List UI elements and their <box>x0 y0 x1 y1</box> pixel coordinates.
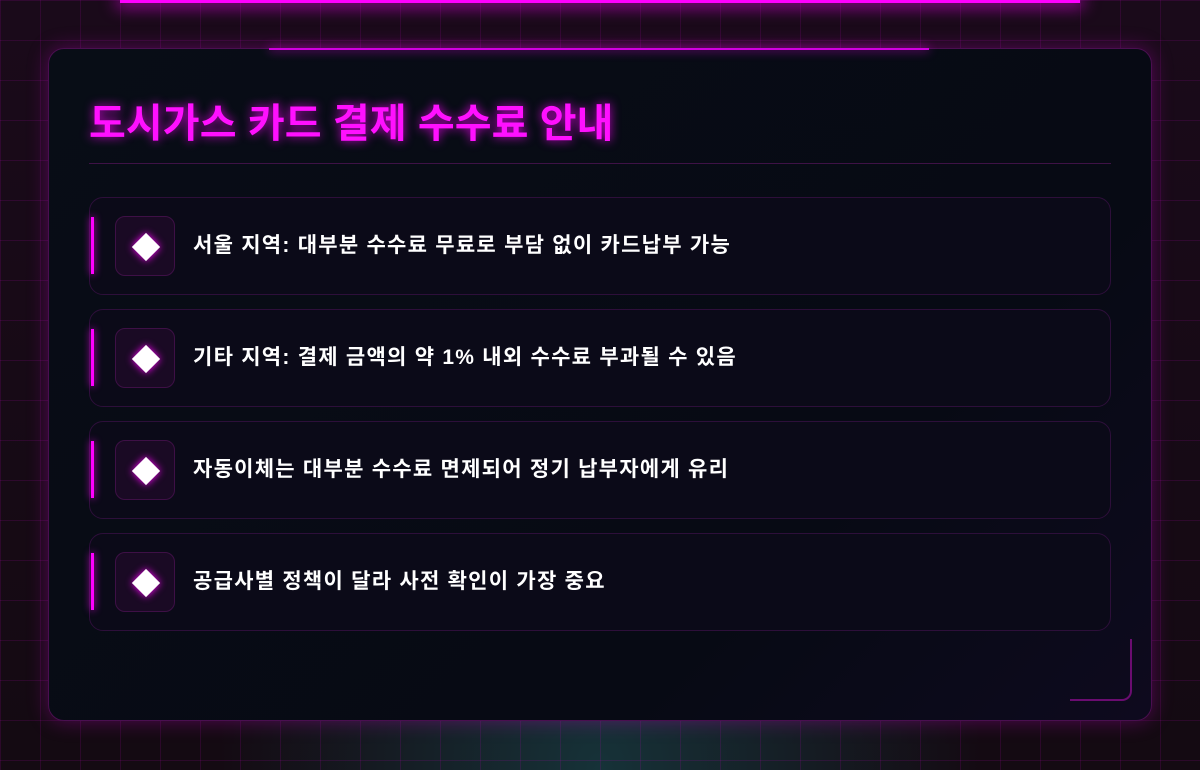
item: supplier policy <box>89 533 1111 631</box>
item: other regions <box>89 309 1111 407</box>
icon: diamond <box>115 216 175 276</box>
text: 자동이체는 대부분 수수료 면제되어 정기 납부자에게 유리 <box>193 458 729 481</box>
icon: diamond <box>115 328 175 388</box>
icon: diamond <box>115 552 175 612</box>
item: Seoul <box>89 197 1111 295</box>
icon: diamond <box>115 440 175 500</box>
item: auto transfer <box>89 421 1111 519</box>
text: 기타 지역: 결제 금액의 약 1% 내외 수수료 부과될 수 있음 <box>193 346 737 369</box>
title: 도시가스 카드 결제 수수료 안내 <box>89 102 614 146</box>
text: 공급사별 정책이 달라 사전 확인이 가장 중요 <box>193 570 606 593</box>
text: 서울 지역: 대부분 수수료 무료로 부담 없이 카드납부 가능 <box>193 234 731 257</box>
